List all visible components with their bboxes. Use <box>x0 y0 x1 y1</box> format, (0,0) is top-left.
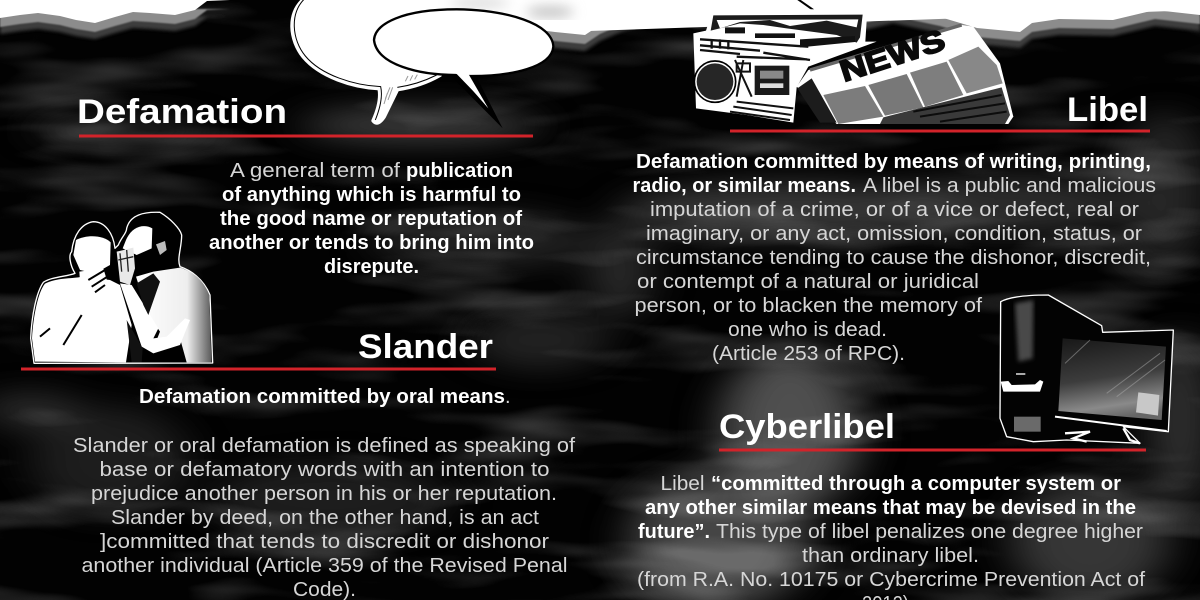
torn paper strip at top <box>0 0 1200 51</box>
text block: cyberlibel definition: than ordinary libel. <box>802 545 979 567</box>
text block: slander definition: Slander or oral defamation is defined as speaking of <box>73 435 575 457</box>
text block: slander definition: base or defamatory words with an intention to <box>100 459 550 481</box>
text block: slander definition: prejudice another person in his or her reputation. <box>91 483 557 505</box>
icon: two men whispering <box>31 212 213 363</box>
text block: libel definition: person, or to blacken the memory of <box>634 295 982 317</box>
text block: cyberlibel definition: This type of libel penalizes one degree higher <box>716 521 1143 543</box>
text block: libel definition: (Article 253 of RPC). <box>712 343 905 365</box>
heading: Libel: Libel <box>1067 91 1148 129</box>
text block: slander lead: . <box>505 386 511 408</box>
back speech bubble <box>292 0 467 123</box>
text block: defamation definition: the good name or reputation of <box>220 208 522 230</box>
text block: defamation definition: A general term of <box>230 160 400 182</box>
text block: libel definition: imaginary, or any act, omission, condition, status, or <box>646 223 1142 245</box>
text block: defamation definition: another or tends to bring him into <box>209 232 534 254</box>
headline: NEWS: NEWS <box>836 24 949 89</box>
text block: cyberlibel definition: “committed through a computer system or <box>711 473 1121 495</box>
icon: speech bubbles <box>292 0 553 128</box>
text block: cyberlibel definition <box>637 473 1145 600</box>
text block: libel definition: one who is dead. <box>728 319 887 341</box>
text block: defamation definition: disrepute. <box>324 256 419 278</box>
text block: slander lead: Defamation committed by oral means <box>139 386 505 408</box>
text block: cyberlibel definition: any other similar means that may be devised in the <box>645 497 1136 519</box>
text block: libel definition: radio, or similar means. <box>632 175 856 197</box>
text block: libel definition <box>632 151 1156 365</box>
text block: libel definition: imputation of a crime, or of a vice or defect, real or <box>650 199 1139 221</box>
text block: libel definition: Defamation committed by means of writing, printing, <box>636 151 1151 173</box>
radio <box>693 0 877 123</box>
heading: Cyberlibel: Cyberlibel <box>719 408 895 446</box>
heading: Defamation: Defamation <box>77 93 287 131</box>
text block: libel definition: A libel is a public and malicious <box>863 175 1156 197</box>
panel: cyberlibel <box>637 408 1146 600</box>
red rule under Slander <box>21 368 496 370</box>
text block: slander definition: ]committed that tends to discredit or dishonor <box>100 531 549 553</box>
front speech bubble <box>374 9 553 128</box>
newspaper <box>797 24 1013 124</box>
text block: slander definition: another individual (Article 359 of the Revised Penal <box>82 555 568 577</box>
panel: slander <box>21 328 575 600</box>
heading: Slander: Slander <box>358 328 493 366</box>
text block: cyberlibel definition: Libel <box>660 473 704 495</box>
panel: libel <box>632 91 1156 365</box>
text block: cyberlibel definition: future”. <box>638 521 710 543</box>
red rule under Libel <box>730 130 1150 132</box>
icon: radio and newspaper <box>693 0 1013 124</box>
text block: slander definition <box>73 435 575 600</box>
icon: desktop computer <box>1000 295 1173 443</box>
text block: defamation definition <box>209 160 534 278</box>
text block: cyberlibel definition: (from R.A. No. 10175 or Cybercrime Prevention Act of <box>637 569 1145 591</box>
text block: defamation definition: of anything which is harmful to <box>222 184 521 206</box>
panel: defamation <box>77 93 534 278</box>
text block: libel definition: circumstance tending to cause the dishonor, discredit, <box>636 247 1151 269</box>
red rule under Cyberlibel <box>719 448 1146 452</box>
text block: defamation definition: publication <box>406 160 513 182</box>
red rule under Defamation <box>79 134 533 138</box>
text block: libel definition: or contempt of a natural or juridical <box>637 271 979 293</box>
text block: slander definition: Slander by deed, on the other hand, is an act <box>111 507 539 529</box>
